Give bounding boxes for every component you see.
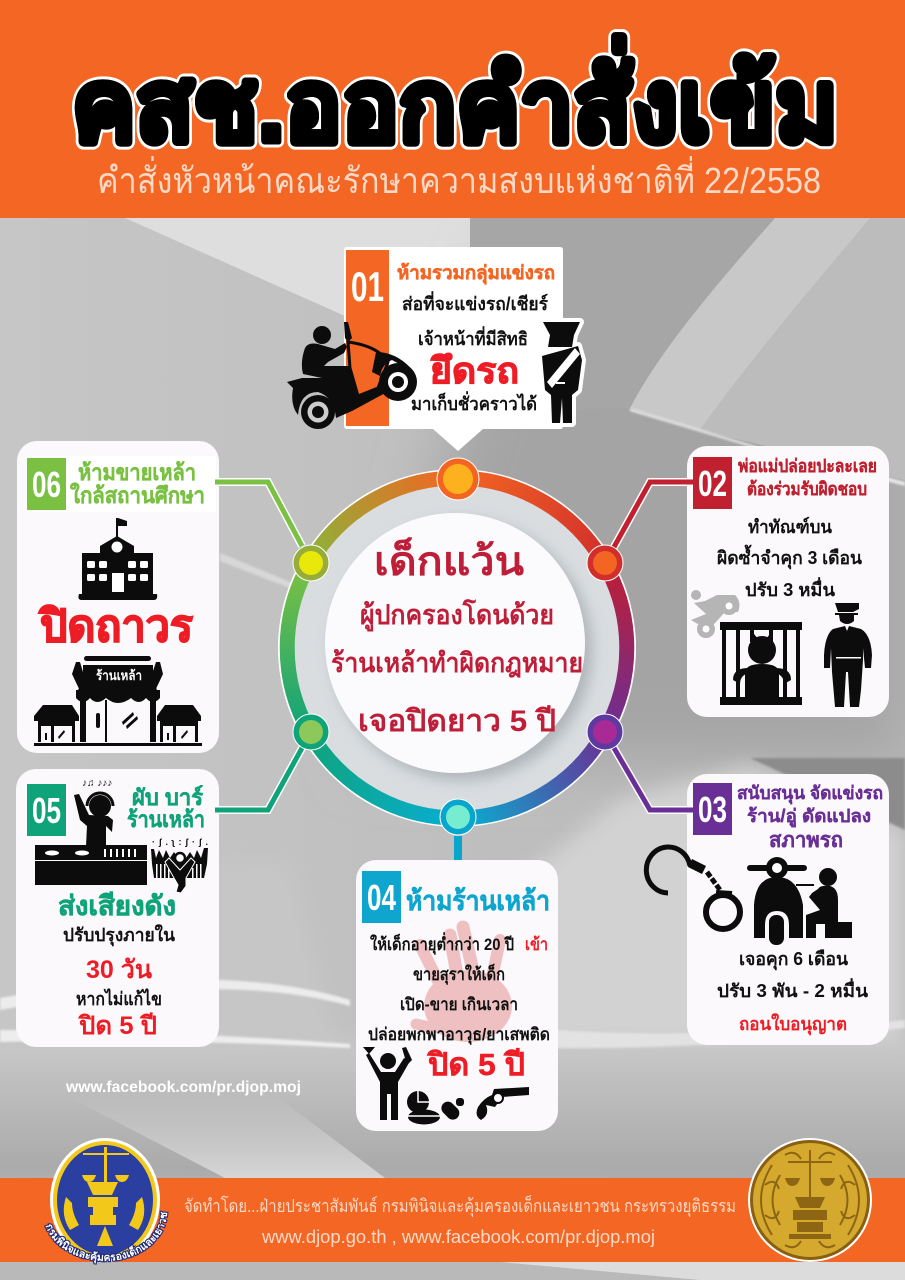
text 02	[717, 516, 863, 600]
text 01: ส่อที่จะแข่งรถ/เชียร์	[402, 291, 548, 314]
logo: gold seal	[748, 1138, 872, 1262]
penalty 04: ปิด 5 ปี	[427, 1047, 525, 1082]
title: คสช.ออกคำสั่งเข้ม	[71, 34, 837, 162]
number 05: 05	[32, 790, 61, 831]
text 03: เจอคุก 6 เดือน	[739, 949, 849, 971]
facebook url: www.facebook.com/pr.djop.moj	[65, 1079, 301, 1096]
heading 03: สนับสนุน จัดแข่งรถ	[737, 783, 883, 805]
heading 03: ร้าน/อู่ ดัดแปลง	[747, 806, 871, 828]
connector: 05	[215, 748, 302, 810]
icon: dancing crowd: ·ʃ.ʅ:ʃ·ʃ.	[152, 837, 208, 847]
center text: เด็กแว้น	[374, 536, 524, 584]
footer band	[0, 1178, 905, 1262]
heading 02: ต้องร่วมรับผิดชอบ	[747, 479, 867, 499]
heading 06: ห้ามขายเหล้า	[78, 460, 196, 485]
text 03	[717, 949, 869, 1001]
icon: officer	[542, 322, 582, 423]
text 01	[402, 291, 548, 414]
panel 01	[287, 247, 582, 451]
shop sign: ร้านเหล้า	[96, 668, 142, 683]
text 05: ปรับปรุงภายใน	[63, 924, 176, 947]
text 04: ให้เด็กอายุต่ำกว่า 20 ปี	[370, 932, 514, 955]
heading 03: สภาพรถ	[769, 829, 843, 852]
icon: revolver	[477, 1087, 529, 1120]
penalty 05: ปิด 5 ปี	[77, 1012, 157, 1040]
center text: ร้านเหล้าทำผิดกฎหมาย	[331, 648, 583, 678]
title: คสช.ออกคำสั่งเข้ม	[72, 35, 838, 163]
text 03: ปรับ 3 พัน - 2 หมื่น	[717, 978, 869, 1001]
text 01: เจ้าหน้าที่มีสิทธิ	[418, 326, 528, 349]
seal caption: กรมพินิจและคุ้มครองเด็กและเยาวชน	[44, 1210, 168, 1265]
header band	[0, 0, 905, 218]
icon: DJ: ♪♫ ♪♪♪	[82, 778, 112, 789]
icon: motorcycle rider	[287, 322, 417, 429]
center text	[331, 536, 583, 738]
number 01: 01	[351, 263, 384, 310]
icon: police officer	[824, 603, 872, 707]
heading 03	[737, 783, 883, 852]
nodes	[293, 458, 623, 835]
number 06: 06	[32, 464, 61, 505]
connector: 04	[454, 836, 462, 860]
connector: 06	[215, 482, 302, 546]
title: คสช.ออกคำสั่งเข้ม	[73, 36, 839, 164]
text 04: ขายสุราให้เด็ก	[413, 962, 505, 985]
highlight: seize vehicle: ยึดรถ	[430, 350, 519, 391]
heading 05: ผับ บาร์	[132, 785, 203, 810]
icon: prison cell	[720, 622, 802, 705]
icon: scooter and mechanic	[747, 857, 852, 945]
text 05: หากไม่แก้ไข	[76, 988, 162, 1009]
logo: department seal	[44, 1138, 168, 1265]
connector: 03	[614, 748, 695, 810]
text 02: ปรับ 3 หมื่น	[745, 577, 836, 600]
heading 06: ใกล้สถานศึกษา	[70, 482, 205, 508]
icon: liquor shop	[34, 656, 202, 746]
text 02: ผิดซ้ำจำคุก 3 เดือน	[717, 544, 863, 570]
heading: loud noise: ส่งเสียงดัง	[58, 891, 176, 921]
icon: handcuffs	[646, 847, 740, 929]
heading 01: ห้ามรวมกลุ่มแข่งรถ	[397, 262, 555, 285]
subtitle: คำสั่งหัวหน้าคณะรักษาความสงบแห่งชาติที่ 22/2558	[97, 156, 821, 201]
heading 02	[738, 456, 877, 499]
word: enter: เข้า	[525, 935, 548, 954]
connector: 02	[614, 482, 695, 547]
text 02: ทำทัณฑ์บน	[748, 516, 833, 537]
text 04: เปิด-ขาย เกินเวลา	[400, 995, 518, 1014]
icon: figure with drink and gun	[363, 1047, 412, 1120]
text 04	[368, 932, 550, 1045]
icon: red hand print	[416, 927, 512, 1042]
icon: DJ	[35, 778, 147, 885]
heading 04: ห้ามร้านเหล้า	[406, 886, 550, 916]
icon: pills	[407, 1091, 464, 1124]
icon: dancing crowd	[151, 837, 208, 893]
highlight: permanent closure: ปิดถาวร	[38, 602, 193, 651]
text 04: ปล่อยพกพาอาวุธ/ยาเสพติด	[368, 1025, 550, 1045]
number 03: 03	[698, 789, 727, 830]
center text: ผู้ปกครองโดนด้วย	[360, 598, 554, 632]
penalty 05	[77, 956, 157, 1040]
panel 02	[687, 446, 889, 717]
heading 02: พ่อแม่ปล่อยปะละเลย	[738, 456, 877, 476]
text 05	[63, 924, 176, 1009]
penalty 03: ถอนใบอนุญาต	[739, 1013, 847, 1036]
heading 06	[70, 460, 205, 508]
title: คสช.ออกคำสั่งเข้ม	[72, 35, 838, 163]
number 02: 02	[698, 463, 727, 504]
panel 03	[646, 774, 889, 1045]
icon: grey motorcycle	[691, 590, 739, 638]
penalty 05: 30 วัน	[86, 956, 152, 984]
heading 05: ร้านเหล้า	[127, 807, 205, 832]
text 01: มาเก็บชั่วคราวได้	[411, 391, 537, 414]
footer text	[184, 1194, 736, 1247]
footer text: www.djop.go.th , www.facebook.com/pr.djop.moj	[261, 1227, 655, 1247]
panel 04	[356, 860, 558, 1131]
icon: school	[78, 518, 157, 600]
central ring diagram	[278, 458, 636, 835]
heading 05	[127, 785, 205, 832]
ring segments	[287, 478, 627, 818]
center text: เจอปิดยาว 5 ปี	[358, 705, 556, 738]
panel 05	[16, 769, 219, 1047]
panel 06	[17, 441, 219, 753]
footer text: จัดทำโดย...ฝ่ายประชาสัมพันธ์ กรมพินิจและคุ้มครองเด็กและเยาวชน กระทรวงยุติธรรม	[184, 1194, 736, 1217]
number 04: 04	[367, 877, 396, 918]
